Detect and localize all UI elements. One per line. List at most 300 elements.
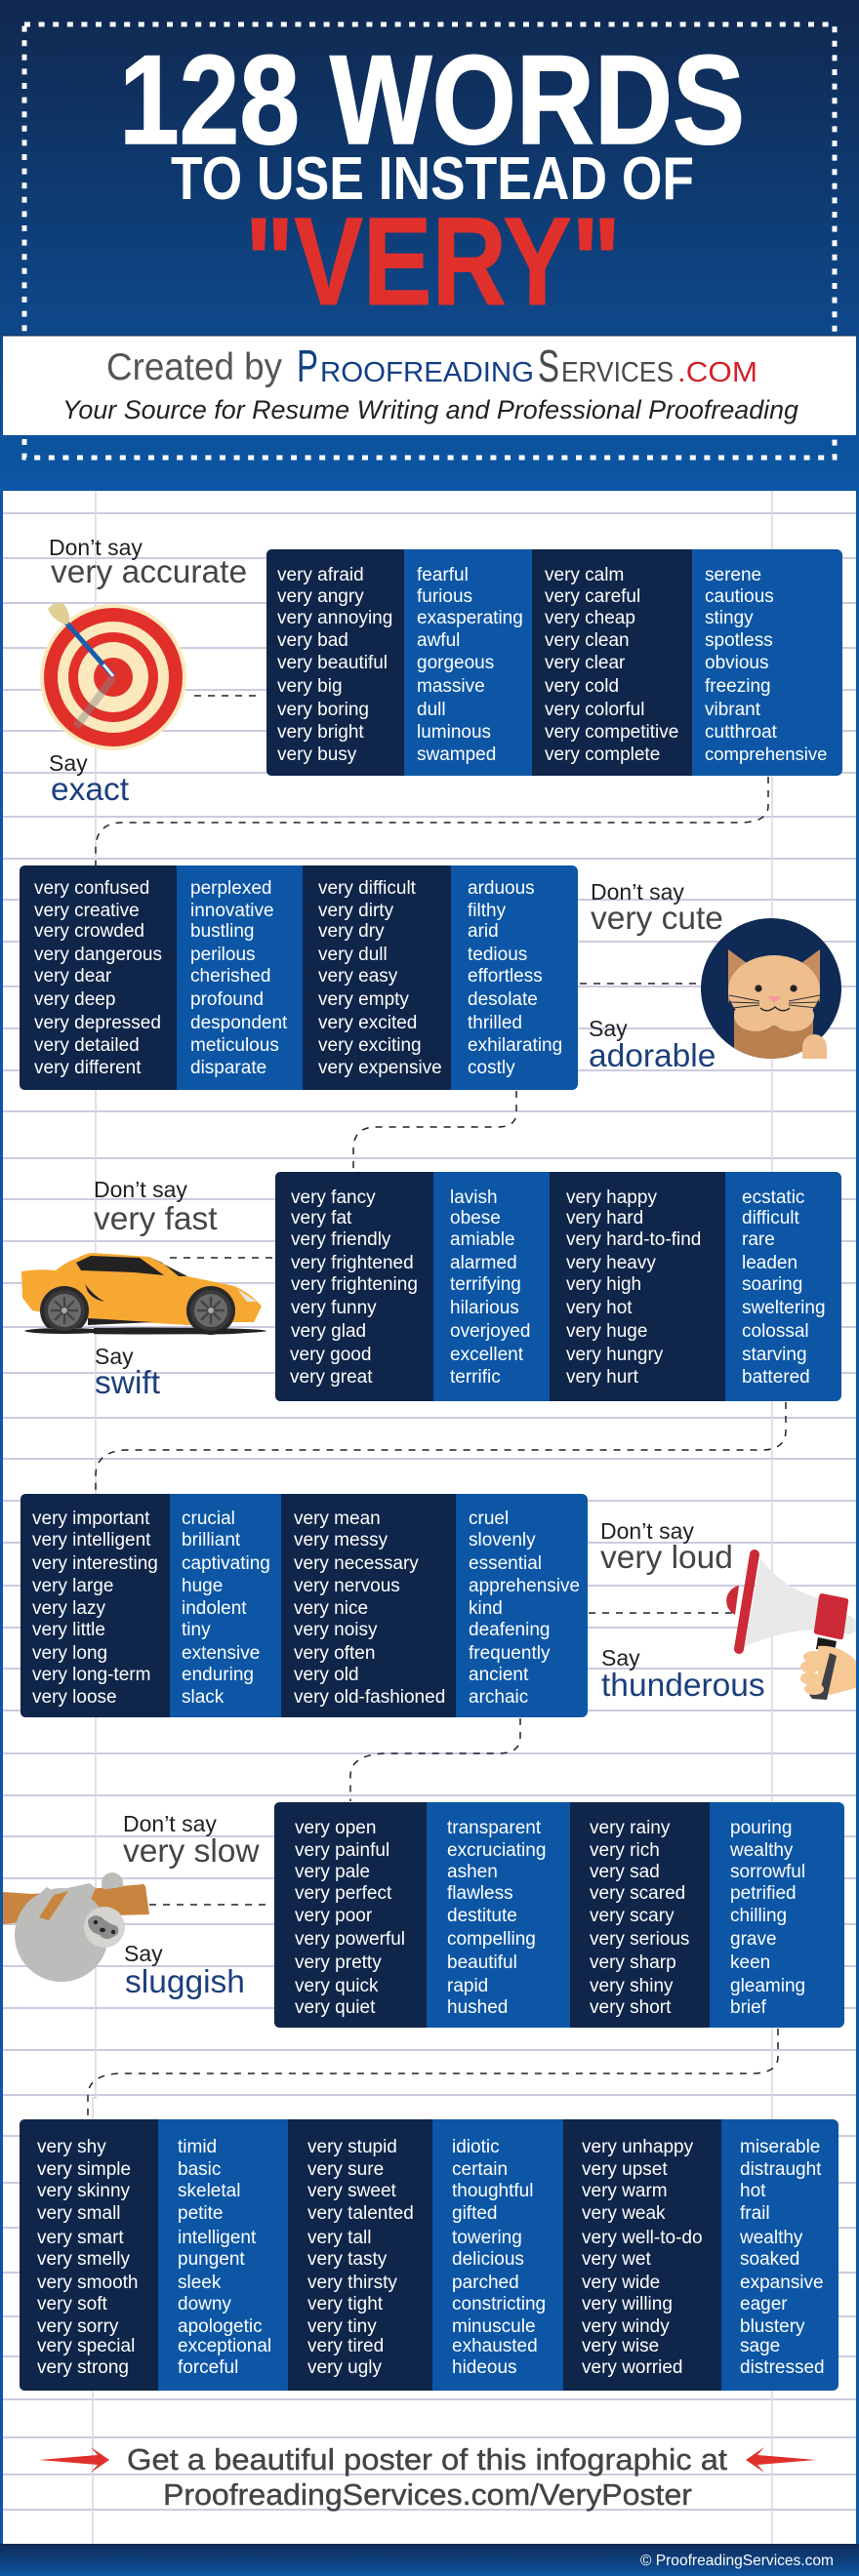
panel: word list 2: very different — [34, 1058, 142, 1078]
connector: list 2 to list 3 — [353, 1091, 516, 1171]
panel: word list 6 — [20, 2119, 839, 2391]
panel: word list 3: terrific — [450, 1367, 501, 1388]
panel: word list 4: enduring — [182, 1665, 254, 1685]
panel: word list 4: very important — [32, 1509, 150, 1529]
logo wordmark: ERVICES — [561, 357, 674, 388]
panel: word list 6: soaked — [740, 2249, 799, 2270]
panel: word list 3: leaden — [742, 1253, 798, 1273]
panel: word list 6: very talented — [307, 2203, 414, 2224]
panel: word list 2: meticulous — [190, 1035, 279, 1056]
panel: word list 6: downy — [178, 2294, 231, 2314]
panel: word list 6: very windy — [582, 2316, 670, 2337]
panel: word list 2: very dry — [318, 921, 385, 942]
section 1 labels: very accurate / exact: exact — [51, 772, 130, 808]
panel: word list 6: very tasty — [307, 2249, 388, 2270]
panel: word list 4: indolent — [182, 1598, 247, 1619]
panel: word list 5: grave — [730, 1929, 777, 1950]
icon: orange sports car — [21, 1253, 266, 1336]
panel: word list 2: innovative — [190, 901, 274, 921]
panel: word list 6: wealthy — [739, 2228, 803, 2248]
panel: word list 6: very sorry — [37, 2316, 119, 2337]
panel: word list 4: slovenly — [469, 1530, 536, 1550]
section 2 labels: very cute / adorable: adorable — [589, 1038, 716, 1074]
panel: word list 5: very scary — [590, 1906, 675, 1926]
panel: word list 5 — [274, 1802, 844, 2028]
panel: word list 6: very well-to-do — [582, 2228, 703, 2248]
section 2 labels: very cute / adorable — [589, 879, 723, 1074]
section 4 labels: very loud / thunderous — [600, 1518, 765, 1704]
panel: word list 2: very creative — [34, 901, 140, 921]
panel: word list 1: very busy — [277, 745, 357, 765]
panel: word list 1 — [266, 549, 842, 776]
panel: word list 6: very tight — [307, 2294, 384, 2314]
panel: word list 6: sage — [740, 2336, 780, 2356]
section 4 labels: very loud / thunderous: Don’t say — [600, 1518, 694, 1544]
panel: word list 1: serene — [705, 565, 761, 585]
panel: word list 1: cutthroat — [705, 722, 778, 743]
panel: word list 6: frail — [740, 2203, 770, 2224]
panel: word list 2: very dirty — [318, 901, 394, 921]
panel: word list 1: very bright — [277, 722, 364, 743]
connector: car to list 3 — [170, 1257, 275, 1259]
panel: word list 6: certain — [452, 2159, 508, 2180]
panel: word list 6: timid — [178, 2137, 217, 2157]
panel: word list 6: very small — [37, 2203, 121, 2224]
panel: word list 2 — [20, 865, 578, 1090]
panel: word list 5: wealthy — [729, 1840, 794, 1861]
panel: word list 2: very exciting — [318, 1035, 422, 1056]
logo wordmark: ROOFREADING — [320, 357, 534, 388]
panel: word list 6: very simple — [37, 2159, 131, 2180]
panel: word list 5: destitute — [447, 1906, 517, 1926]
panel: word list 4: deafening — [469, 1620, 550, 1640]
panel: word list 1: very clear — [545, 653, 626, 673]
panel: word list 6: very tiny — [307, 2316, 377, 2337]
panel: word list 2: profound — [190, 989, 264, 1010]
panel: word list 2: very deep — [34, 989, 115, 1010]
panel: word list 5: very pale — [295, 1862, 370, 1882]
connector: list 5 to list 6 — [88, 2029, 778, 2119]
panel: word list 4: cruel — [469, 1509, 509, 1529]
panel: word list 3: overjoyed — [450, 1321, 530, 1342]
panel: word list 3: hilarious — [450, 1298, 519, 1318]
panel: word list 3: very frightened — [291, 1253, 414, 1273]
footer bar — [0, 2544, 859, 2576]
icon: cat — [701, 918, 841, 1064]
section 1 labels: very accurate / exact: Don’t say — [49, 535, 143, 560]
panel: word list 3: very hard — [566, 1208, 643, 1228]
header banner — [0, 0, 859, 491]
panel: word list 4: very nervous — [294, 1576, 400, 1596]
arrow: left red arrow — [39, 2447, 109, 2473]
panel: word list 1: very boring — [277, 700, 369, 720]
icon: sloth on a branch — [3, 1872, 149, 1982]
panel: word list 2: very expensive — [318, 1058, 442, 1078]
panel: word list 5: rapid — [447, 1976, 488, 1996]
panel: word list 6: distressed — [740, 2357, 825, 2378]
panel: word list 1: very calm — [545, 565, 624, 585]
panel: word list 5: very poor — [295, 1906, 373, 1926]
panel: word list 6: very tall — [307, 2228, 371, 2248]
panel: word list 4: very little — [32, 1620, 105, 1640]
panel: word list 6: very worried — [582, 2357, 682, 2378]
section 1 labels: very accurate / exact: Say — [49, 750, 88, 776]
panel: word list 4: captivating — [182, 1553, 270, 1574]
panel: word list 6: very sure — [307, 2159, 384, 2180]
panel: word list 3: rare — [742, 1229, 775, 1250]
panel: word list 6: very special — [37, 2336, 135, 2356]
panel: word list 6: very skinny — [37, 2181, 131, 2201]
panel: word list 4: very often — [294, 1643, 375, 1664]
panel: word list 3: very fancy — [291, 1187, 376, 1208]
section 4 labels: very loud / thunderous: thunderous — [601, 1668, 765, 1704]
panel: word list 5: excruciating — [447, 1840, 546, 1861]
panel: word list 5: very scared — [590, 1883, 685, 1904]
panel: word list 6: miserable — [740, 2137, 820, 2157]
panel: word list 2: thrilled — [468, 1013, 522, 1033]
panel: word list 1: vibrant — [705, 700, 761, 720]
panel: word list 5: beautiful — [447, 1952, 517, 1973]
section 3 labels: very fast / swift: Say — [95, 1344, 134, 1369]
panel: word list 1: very annoying — [277, 608, 392, 628]
connector: list 1 to list 2 — [96, 777, 768, 865]
panel: word list 5: gleaming — [730, 1976, 805, 1996]
panel: word list 4: extensive — [182, 1643, 260, 1664]
panel: word list 6: forceful — [178, 2357, 238, 2378]
panel: word list 2: disparate — [190, 1058, 266, 1078]
panel: word list 6: idiotic — [452, 2137, 500, 2157]
panel: word list 3: sweltering — [742, 1298, 826, 1318]
panel: word list 1: dull — [417, 700, 446, 720]
logo wordmark: P — [297, 341, 318, 391]
panel: word list 2: perplexed — [190, 878, 271, 899]
connector: sloth to list 5 — [149, 1904, 271, 1906]
panel: word list 3: very fat — [291, 1208, 352, 1228]
panel: word list 2: very detailed — [34, 1035, 140, 1056]
panel: word list 1: very angry — [277, 586, 364, 607]
panel: word list 5: flawless — [447, 1883, 513, 1904]
section 5 labels: very slow / sluggish: Say — [124, 1941, 163, 1966]
section 3 labels: very fast / swift — [94, 1177, 218, 1401]
panel: word list 2: very dear — [34, 966, 112, 986]
panel: word list 3: very funny — [291, 1298, 377, 1318]
tagline: Your Source for Resume Writing and Professional Proofreading — [62, 395, 798, 424]
panel: word list 1: comprehensive — [705, 744, 827, 764]
panel: word list 4: kind — [469, 1598, 503, 1619]
panel: word list 3: very high — [566, 1274, 641, 1295]
panel: word list 4: very intelligent — [32, 1530, 151, 1550]
panel: word list 6: very smooth — [37, 2273, 138, 2293]
panel: word list 2: very difficult — [318, 878, 417, 899]
panel: word list 6: exceptional — [178, 2336, 271, 2356]
panel: word list 3: very frightening — [291, 1274, 418, 1295]
panel: word list 2: very confused — [34, 878, 149, 899]
panel: word list 1: awful — [417, 630, 460, 651]
panel: word list 1: furious — [417, 586, 472, 607]
panel: word list 2: arduous — [468, 878, 535, 899]
panel: word list 6: hot — [740, 2181, 766, 2201]
panel: word list 6: delicious — [452, 2249, 524, 2270]
panel: word list 6: expansive — [740, 2273, 824, 2293]
panel: word list 4: ancient — [469, 1665, 529, 1685]
panel: word list 5: very sharp — [590, 1952, 676, 1973]
panel: word list 6: very weak — [582, 2203, 666, 2224]
panel: word list 5: very sad — [590, 1862, 660, 1882]
panel: word list 6: hideous — [452, 2357, 517, 2378]
panel: word list 4: very long — [32, 1643, 107, 1664]
panel: word list 4: very large — [32, 1576, 113, 1596]
panel: word list 1: very bad — [277, 630, 348, 651]
panel: word list 2: very crowded — [34, 921, 144, 942]
panel: word list 6: very smelly — [37, 2249, 131, 2270]
panel: word list 2: very easy — [318, 966, 398, 986]
panel: word list 5: very shiny — [590, 1976, 674, 1996]
panel: word list 1: very cheap — [545, 608, 635, 628]
panel: word list 2: exhilarating — [468, 1035, 562, 1056]
panel: word list 6: basic — [178, 2159, 221, 2180]
section 5 labels: very slow / sluggish — [123, 1811, 260, 2000]
panel: word list 6: very strong — [37, 2357, 129, 2378]
section 2 labels: very cute / adorable: Don’t say — [591, 879, 684, 905]
logo wordmark: .COM — [677, 357, 757, 388]
logo wordmark — [297, 341, 757, 391]
section 1 labels: very accurate / exact: very accurate — [51, 554, 247, 590]
section 5 labels: very slow / sluggish: sluggish — [125, 1964, 245, 2000]
panel: word list 3: soaring — [742, 1274, 802, 1295]
panel: word list 4: frequently — [469, 1643, 551, 1664]
panel: word list 4: very mean — [294, 1509, 381, 1529]
panel: word list 5: very perfect — [295, 1883, 392, 1904]
arrow: right red arrow — [746, 2447, 816, 2473]
title: very: "VERY" — [245, 192, 621, 332]
panel: word list 6: very wide — [582, 2273, 660, 2293]
panel: word list 3: battered — [742, 1367, 810, 1388]
panel: word list 1: very cold — [545, 676, 619, 697]
panel: word list 6: very unhappy — [582, 2137, 694, 2157]
panel: word list 4: very nice — [294, 1598, 368, 1619]
panel: word list 6: distraught — [740, 2159, 822, 2180]
call to action text — [127, 2442, 727, 2512]
panel: word list 4: very noisy — [294, 1620, 378, 1640]
icon: megaphone in hand — [726, 1554, 856, 1700]
panel: word list 6: exhausted — [452, 2336, 538, 2356]
panel: word list 3: excellent — [450, 1345, 524, 1365]
panel: word list 6: gifted — [452, 2203, 497, 2224]
panel: word list 2: perilous — [190, 945, 256, 965]
white credit band — [3, 336, 856, 435]
panel: word list 3: alarmed — [450, 1253, 517, 1273]
panel: word list 4: apprehensive — [469, 1576, 580, 1596]
footer copyright: © ProofreadingServices.com — [640, 2553, 834, 2569]
panel: word list 6: very soft — [37, 2294, 108, 2314]
panel: word list 6: very willing — [582, 2294, 673, 2314]
panel: word list 1: very afraid — [277, 565, 364, 585]
panel: word list 2: very excited — [318, 1013, 417, 1033]
panel: word list 2: despondent — [190, 1013, 288, 1033]
panel: word list 2: very dangerous — [34, 945, 162, 965]
panel: word list 3: starving — [742, 1345, 807, 1365]
panel: word list 2: very empty — [318, 989, 409, 1010]
panel: word list 6: parched — [452, 2273, 519, 2293]
panel: word list 3: difficult — [742, 1208, 800, 1228]
section 3 labels: very fast / swift: Don’t say — [94, 1177, 187, 1202]
section 4 labels: very loud / thunderous: Say — [601, 1645, 640, 1670]
panel: word list 5: compelling — [447, 1929, 536, 1950]
panel: word list 1: exasperating — [417, 608, 523, 628]
panel: word list 4: very old — [294, 1665, 359, 1685]
panel: word list 3 — [275, 1172, 841, 1401]
panel: word list 3: very hungry — [566, 1345, 664, 1365]
panel: word list 6: very tired — [307, 2336, 384, 2356]
panel: word list 4: very old-fashioned — [294, 1687, 445, 1708]
panel: word list 5: very pretty — [295, 1952, 382, 1973]
panel: word list 6: minuscule — [452, 2316, 536, 2337]
panel: word list 4 — [20, 1494, 588, 1717]
panel: word list 1: very colorful — [545, 700, 644, 720]
section 5 labels: very slow / sluggish: very slow — [123, 1833, 260, 1870]
panel: word list 1: swamped — [417, 745, 496, 765]
panel: word list 6: eager — [740, 2294, 788, 2314]
panel: word list 3: very hard-to-find — [566, 1229, 701, 1250]
section 5 labels: very slow / sluggish: Don’t say — [123, 1811, 217, 1836]
section 3 labels: very fast / swift: swift — [95, 1365, 161, 1401]
panel: word list 3: very great — [290, 1367, 373, 1388]
connector: dartboard to list — [194, 695, 261, 697]
panel: word list 4: crucial — [182, 1509, 235, 1529]
panel: word list 1: stingy — [705, 608, 754, 628]
panel: word list 1: very competitive — [545, 722, 678, 743]
panel: word list 6: very thirsty — [307, 2273, 397, 2293]
panel: word list 4: very interesting — [32, 1553, 158, 1574]
panel: word list 6: towering — [452, 2228, 522, 2248]
panel: word list 3: very hurt — [566, 1367, 639, 1388]
panel: word list 2: tedious — [468, 945, 527, 965]
panel: word list 3: very heavy — [566, 1253, 656, 1273]
panel: word list 6: very smart — [37, 2228, 124, 2248]
panel: word list 1: luminous — [417, 722, 491, 743]
title: 128 WORDS: 128 WORDS — [119, 28, 745, 171]
panel: word list 6: skeletal — [178, 2181, 240, 2201]
panel: word list 3: very hot — [566, 1298, 633, 1318]
panel: word list 5: ashen — [447, 1862, 498, 1882]
call to action text: ProofreadingServices.com/VeryPoster — [163, 2477, 692, 2512]
panel: word list 1: very clean — [545, 630, 630, 651]
panel: word list 2: effortless — [468, 966, 543, 986]
panel: word list 3: very friendly — [291, 1229, 391, 1250]
panel: word list 3: very good — [290, 1345, 371, 1365]
panel: word list 5: very quick — [295, 1976, 379, 1996]
panel: word list 5: very painful — [295, 1840, 389, 1861]
panel: word list 5: pouring — [730, 1818, 792, 1838]
panel: word list 3: amiable — [450, 1229, 515, 1250]
panel: word list 6: very warm — [582, 2181, 668, 2201]
panel: word list 2: desolate — [468, 989, 538, 1010]
panel: word list 5: keen — [730, 1952, 770, 1973]
panel: word list 3: obese — [450, 1208, 501, 1228]
icon: dartboard — [40, 603, 186, 750]
panel: word list 3: ecstatic — [742, 1187, 804, 1208]
panel: word list 1: massive — [417, 676, 485, 697]
panel: word list 6: very shy — [37, 2137, 106, 2157]
panel: word list 2: filthy — [468, 901, 507, 921]
panel: word list 1: fearful — [417, 565, 469, 585]
title: to use instead of: TO USE INSTEAD OF — [171, 145, 694, 213]
panel: word list 1: gorgeous — [417, 653, 494, 673]
connector: list 4 to megaphone — [589, 1612, 734, 1614]
panel: word list 6: apologetic — [178, 2316, 263, 2337]
panel: word list 2: arid — [468, 921, 499, 942]
panel: word list 1: very beautiful — [277, 653, 388, 673]
panel: word list 5: very quiet — [295, 1997, 376, 2018]
section 1 labels: very accurate / exact — [49, 535, 247, 808]
panel: word list 5: very rainy — [590, 1818, 671, 1838]
panel: word list 4: very necessary — [294, 1553, 419, 1574]
section 2 labels: very cute / adorable: very cute — [591, 901, 723, 937]
connector: list 4 to list 5 — [350, 1718, 520, 1801]
panel: word list 4: slack — [182, 1687, 225, 1708]
panel: word list 1: very careful — [545, 586, 640, 607]
panel: word list 1: very complete — [545, 745, 660, 765]
panel: word list 2: very depressed — [34, 1013, 161, 1033]
panel: word list 4: archaic — [469, 1687, 528, 1708]
created by label: Created by — [106, 346, 282, 388]
section 4 labels: very loud / thunderous: very loud — [600, 1540, 733, 1576]
panel: word list 5: very powerful — [295, 1929, 405, 1950]
panel: word list 4: very lazy — [32, 1598, 105, 1619]
panel: word list 2: bustling — [190, 921, 254, 942]
panel: word list 1: very big — [277, 676, 343, 697]
panel: word list 4: tiny — [182, 1620, 211, 1640]
panel: word list 1: obvious — [705, 653, 769, 673]
panel: word list 5: very open — [295, 1818, 376, 1838]
panel: word list 6: thoughtful — [452, 2181, 533, 2201]
panel: word list 5: brief — [730, 1997, 767, 2018]
panel: word list 1: spotless — [705, 630, 773, 651]
panel: word list 5: petrified — [730, 1883, 797, 1904]
panel: word list 4: very messy — [294, 1530, 389, 1550]
panel: word list 4: essential — [469, 1553, 542, 1574]
section 2 labels: very cute / adorable: Say — [589, 1016, 628, 1041]
panel: word list 5: sorrowful — [730, 1862, 805, 1882]
panel: word list 6: petite — [178, 2203, 223, 2224]
panel: word list 1: cautious — [705, 586, 774, 607]
panel: word list 6: constricting — [452, 2294, 546, 2314]
panel: word list 6: very wise — [582, 2336, 659, 2356]
logo wordmark: S — [538, 341, 559, 391]
panel: word list 3: colossal — [742, 1321, 809, 1342]
section 3 labels: very fast / swift: very fast — [94, 1201, 218, 1237]
panel: word list 5: very rich — [590, 1840, 660, 1861]
panel: word list 2: very dull — [318, 945, 388, 965]
panel: word list 4: very long-term — [32, 1665, 150, 1685]
panel: word list 2: cherished — [190, 966, 270, 986]
panel: word list 4: brilliant — [182, 1530, 241, 1550]
panel: word list 6: pungent — [178, 2249, 245, 2270]
panel: word list 5: very serious — [590, 1929, 689, 1950]
connector: list 3 to list 4 — [96, 1402, 786, 1494]
panel: word list 3: lavish — [450, 1187, 498, 1208]
panel: word list 6: intelligent — [178, 2228, 257, 2248]
panel: word list 5: chilling — [730, 1906, 787, 1926]
panel: word list 3: terrifying — [450, 1274, 521, 1295]
panel: word list 5: very short — [590, 1997, 672, 2018]
panel: word list 5: hushed — [447, 1997, 508, 2018]
panel: word list 6: very upset — [582, 2159, 668, 2180]
panel: word list 1: freezing — [705, 676, 771, 697]
panel: word list 3: very glad — [291, 1321, 366, 1342]
panel: word list 6: very ugly — [307, 2357, 383, 2378]
call to action text: Get a beautiful poster of this infographic at — [127, 2442, 727, 2476]
